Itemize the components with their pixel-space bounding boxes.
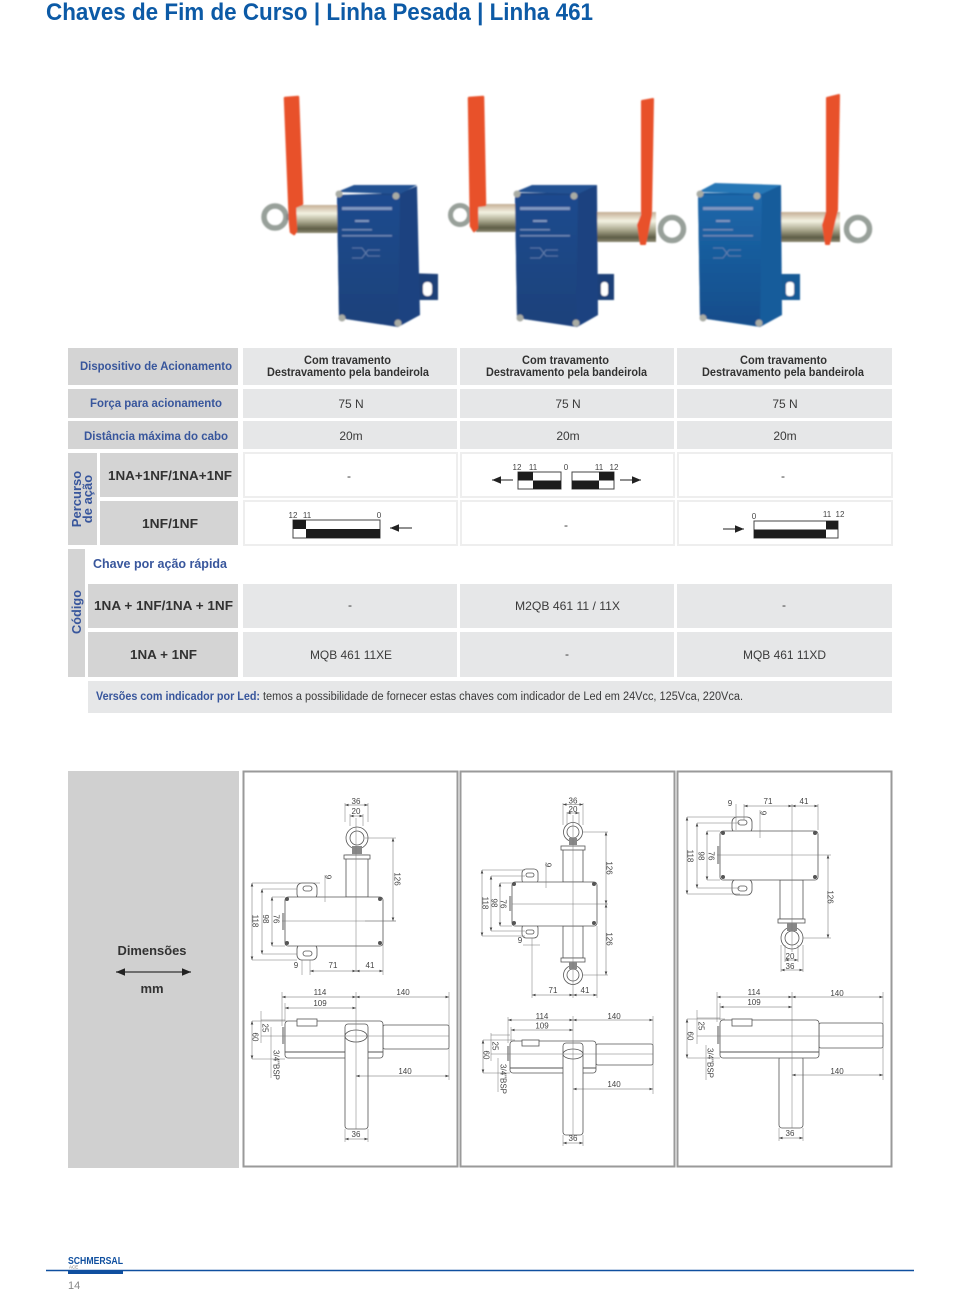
front view 1: 71 xyxy=(329,961,338,970)
travel diagram: left and right bars: 0 xyxy=(564,463,569,472)
side view 3: 3/4"BSP xyxy=(706,1048,714,1078)
side view 2 xyxy=(482,1012,653,1146)
front view 1: 76 xyxy=(272,915,280,924)
switch 1 xyxy=(264,97,438,327)
front view 1: 118 xyxy=(250,915,260,928)
row: distância máxima do cabo: 20m xyxy=(556,429,580,443)
row: 1NF/1NF travel diagrams: - xyxy=(564,518,568,532)
front view 1: 36 xyxy=(352,797,361,806)
panel: drawing 3 xyxy=(678,772,892,1166)
travel diagram: bar with right arrow: 11 xyxy=(823,510,832,519)
side view 1: 3/4"BSP xyxy=(272,1050,280,1080)
logo: Schmersal ACE: SCHMERSAL xyxy=(68,1256,123,1267)
panel: drawing 2 xyxy=(460,772,674,1166)
note: versões com indicador por Led: Versões com indicador por Led: xyxy=(96,691,260,703)
row: 1NA + 1NF codes: - xyxy=(565,647,569,661)
front view 3 xyxy=(686,797,834,972)
side view 3: 109 xyxy=(747,998,761,1007)
side view 1: 60 xyxy=(250,1033,260,1042)
row label: percurso de ação: de ação xyxy=(80,475,95,523)
panel: dimensões label xyxy=(68,771,239,1168)
row label: percurso de ação: Percurso xyxy=(69,471,84,527)
row: força para acionamento: Força para acionamento xyxy=(90,396,222,410)
row label: código xyxy=(68,549,85,677)
side view 2: 140 xyxy=(607,1080,621,1089)
logo: Schmersal ACE: ACE xyxy=(69,1264,78,1270)
row: 1NA + 1NF codes: 1NA + 1NF xyxy=(130,647,197,662)
row: 1NA+1NF/1NA+1NF travel diagrams: - xyxy=(781,469,785,483)
side view 2: 60 xyxy=(482,1051,490,1060)
side view 3: 114 xyxy=(748,988,761,997)
photo: three switches xyxy=(264,95,870,327)
travel diagram: bar with right arrow: 0 xyxy=(752,512,757,521)
switch 2 xyxy=(450,97,684,327)
side view 2: 36 xyxy=(569,1134,578,1143)
front view 2: 36 xyxy=(569,796,578,806)
front view 3: 41 xyxy=(800,797,809,806)
front view 1: 20 xyxy=(352,807,361,816)
row: distância máxima do cabo xyxy=(68,421,892,449)
front view 2: 41 xyxy=(581,986,590,995)
front view 1: 126 xyxy=(392,872,402,886)
row: distância máxima do cabo: Distância máxima do cabo xyxy=(84,429,228,443)
row: 1NA + 1NF/1NA + 1NF codes xyxy=(88,584,892,628)
side view 3: 25 xyxy=(696,1022,706,1031)
row label: percurso de ação xyxy=(68,453,97,545)
front view 3: 20 xyxy=(786,952,795,961)
front view 2: 98 xyxy=(490,899,498,908)
side view 2: 109 xyxy=(535,1022,549,1030)
travel diagram: bar with left arrow: 0 xyxy=(377,511,382,520)
side view 1 xyxy=(250,988,449,1142)
side view 1: 36 xyxy=(352,1130,361,1139)
note: versões com indicador por Led: temos a possibilidade de fornecer estas chaves com indicador de Led em 24Vcc, 125Vca, 220Vca. xyxy=(263,691,743,703)
row: 1NA + 1NF/1NA + 1NF codes: - xyxy=(782,598,786,612)
footer xyxy=(46,1256,914,1289)
front view 2: 126 xyxy=(604,861,614,875)
travel diagram: bar with right arrow xyxy=(723,510,845,538)
front view 3: 118 xyxy=(686,850,694,863)
front view 2: 76 xyxy=(498,900,508,909)
front view 1: 41 xyxy=(366,961,375,970)
row: dispositivo de acionamento: Destravamento pela bandeirola xyxy=(702,365,864,379)
travel diagram: bar with left arrow xyxy=(289,511,412,538)
row: distância máxima do cabo: 20m xyxy=(773,429,797,443)
row: força para acionamento: 75 N xyxy=(555,397,581,411)
row: 1NA+1NF/1NA+1NF travel diagrams xyxy=(100,453,892,497)
front view 2 xyxy=(480,796,614,998)
switch 3 xyxy=(696,95,870,327)
dimensions section xyxy=(68,771,892,1168)
side view 1: 140 xyxy=(398,1067,412,1076)
row: 1NF/1NF travel diagrams: 1NF/1NF xyxy=(142,516,198,531)
side view 3: 140 xyxy=(830,989,844,998)
row: 1NA + 1NF/1NA + 1NF codes: 1NA + 1NF/1NA + 1NF xyxy=(94,598,233,613)
front view 3: 36 xyxy=(786,962,795,971)
travel diagram: left and right bars: 12 xyxy=(513,463,522,472)
logo: Schmersal ACE xyxy=(68,1256,123,1274)
front view 2: 9 xyxy=(518,936,523,945)
row: dispositivo de acionamento: Destravamento pela bandeirola xyxy=(486,365,647,379)
front view 1: 98 xyxy=(261,915,270,924)
row: 1NA + 1NF/1NA + 1NF codes: - xyxy=(348,598,352,612)
side view 2: 3/4"BSP xyxy=(498,1064,508,1094)
row: 1NF/1NF travel diagrams xyxy=(100,501,892,545)
row: 1NA + 1NF codes: MQB 461 11XD xyxy=(743,648,826,662)
front view 3: 9 xyxy=(728,799,733,808)
travel diagram: left and right bars: 11 xyxy=(595,463,604,472)
side view 3: 36 xyxy=(786,1129,795,1138)
side view 1: 25 xyxy=(260,1024,270,1033)
travel diagram: left and right bars: 11 xyxy=(529,463,538,472)
row: 1NA + 1NF/1NA + 1NF codes: M2QB 461 11 / 11X xyxy=(515,599,620,613)
side view 3: 140 xyxy=(830,1067,844,1076)
side view 1: 140 xyxy=(396,988,410,997)
travel diagram: bar with right arrow: 12 xyxy=(836,510,845,519)
row: dispositivo de acionamento: Com travamento xyxy=(740,353,827,367)
panel: dimensões label: mm xyxy=(140,981,164,996)
row label: código: Código xyxy=(69,590,84,634)
front view 2: 71 xyxy=(549,986,558,995)
row: força para acionamento: 75 N xyxy=(338,397,364,411)
row: dispositivo de acionamento xyxy=(68,348,892,385)
side view 2: 25 xyxy=(490,1042,500,1051)
side view 3 xyxy=(686,988,883,1141)
front view 2: 20 xyxy=(569,805,578,814)
row: dispositivo de acionamento: Com travamento xyxy=(522,353,609,367)
front view 2: 118 xyxy=(480,897,490,910)
row: força para acionamento xyxy=(68,389,892,418)
panel: dimensões label: Dimensões xyxy=(118,943,186,958)
front view 3: 126 xyxy=(826,890,834,904)
side view 2: 114 xyxy=(536,1012,549,1021)
front view 3: 98 xyxy=(696,852,706,861)
front view 1 xyxy=(250,797,402,975)
row: dispositivo de acionamento: Dispositivo de Acionamento xyxy=(80,359,232,373)
front view 3: 76 xyxy=(706,852,716,861)
front view 1: 9 xyxy=(294,961,299,970)
row: força para acionamento: 75 N xyxy=(772,397,798,411)
front view 2: 9 xyxy=(544,863,552,868)
side view 1: 114 xyxy=(314,988,327,997)
row: distância máxima do cabo: 20m xyxy=(339,429,363,443)
row: 1NA+1NF/1NA+1NF travel diagrams: 1NA+1NF/1NA+1NF xyxy=(108,468,232,483)
row: 1NA + 1NF codes xyxy=(88,632,892,677)
front view 2: 126 xyxy=(604,932,614,946)
travel diagram: left and right bars: 12 xyxy=(610,463,619,472)
row: 1NA + 1NF codes: MQB 461 11XE xyxy=(310,648,392,662)
front view 1: 9 xyxy=(324,875,332,880)
subheading: chave por ação rápida: Chave por ação rápida xyxy=(93,556,228,571)
side view 2: 140 xyxy=(607,1012,621,1021)
travel diagram: bar with left arrow: 12 xyxy=(289,511,298,520)
specification table xyxy=(68,348,892,713)
side view 3: 60 xyxy=(686,1032,694,1041)
panel: drawing 1 xyxy=(244,772,458,1166)
row: 1NA+1NF/1NA+1NF travel diagrams: - xyxy=(347,469,351,483)
travel diagram: left and right bars xyxy=(492,463,641,489)
travel diagram: bar with left arrow: 11 xyxy=(303,511,312,520)
front view 3: 71 xyxy=(764,797,773,806)
note: versões com indicador por Led xyxy=(88,681,892,713)
side view 1: 109 xyxy=(313,999,327,1008)
row: dispositivo de acionamento: Com travamento xyxy=(304,353,391,367)
front view 3: 9 xyxy=(758,811,768,816)
row: dispositivo de acionamento: Destravamento pela bandeirola xyxy=(267,365,429,379)
